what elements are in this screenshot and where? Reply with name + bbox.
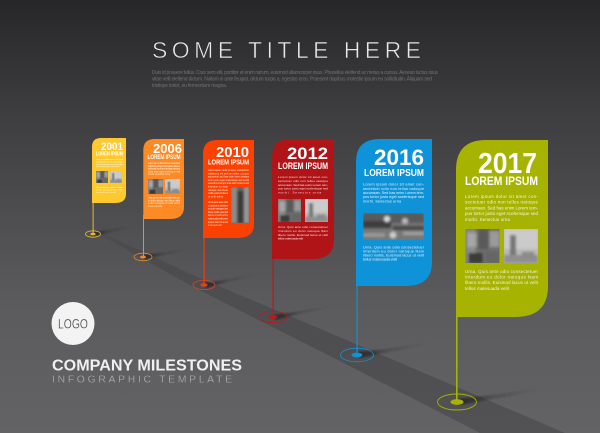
logo badge bbox=[52, 302, 94, 345]
flag content 2016: LOREM IPSUM bbox=[364, 168, 424, 179]
flag content 2006: accumsan sed has enim lorem tempus bbox=[148, 168, 181, 171]
intro text block: Duis id posuere tellus. Cras sem elit, porttitor et enim rutrum, euismod ullamcorper risus. Phasellus eleifend ac metus a cursus. Aenean luctus risus bbox=[152, 70, 438, 76]
flag content 2006: tortor justo eget scelerisque sed bbox=[148, 170, 181, 173]
company heading: COMPANY MILESTONES bbox=[52, 358, 242, 374]
flag content 2010: lacus ut velit tellus bbox=[208, 214, 229, 217]
flag content 2006 bbox=[148, 141, 182, 208]
flag content 2010: senectus urna quis ante odio consectetuer bbox=[208, 182, 249, 185]
flag content 2010: ut velit tellus bbox=[208, 195, 224, 198]
flag content 2016: Lorem ipsum dolor sit amet con- bbox=[363, 183, 425, 187]
flag content 2012: 2012 bbox=[287, 144, 328, 163]
flag content 2006: eu dolor natoque nam libero mollis bbox=[148, 199, 181, 202]
flag content 2017: LOREM IPSUM bbox=[465, 175, 538, 188]
flag content 2016: morbi. Senectus urna bbox=[363, 199, 402, 203]
marker 2016 bbox=[340, 283, 430, 362]
marker 2006 bbox=[134, 215, 192, 261]
flag content 2010: accumsan sed has enim lorem tempus bbox=[208, 176, 250, 179]
flag content 2010: Urna quis ante odio bbox=[208, 201, 229, 204]
flag 2017 bbox=[456, 140, 548, 317]
flag 2006 bbox=[143, 139, 184, 219]
marker 2001 bbox=[86, 200, 135, 237]
flag content 2012: morbi. Senectus urna bbox=[278, 190, 321, 194]
milestone 2006 bbox=[134, 139, 192, 261]
flag content 2012: Urna. Quis ante odio consectetuer bbox=[278, 225, 328, 229]
flag content 2017: sectetuer odio non tellus natoque bbox=[465, 200, 539, 205]
flag content 2006: Urna quis ante odio consectetuer interdum bbox=[148, 197, 180, 200]
flag content 2017: Lorem ipsum dolor sit amet con- bbox=[465, 194, 539, 199]
flag content 2017: 2017 bbox=[478, 148, 537, 180]
milestone 2017 bbox=[438, 140, 548, 410]
milestone 2012 bbox=[259, 139, 338, 323]
flag content 2010: consectetuer interdum bbox=[208, 204, 228, 207]
flag content 2010: libero mollis euismod bbox=[208, 211, 229, 214]
flag content 2006: Lorem ipsum dolor sit amet consectetur bbox=[148, 162, 180, 165]
flag content 2006: LOREM IPSUM bbox=[148, 154, 180, 161]
flag content 2010: Lorem ipsum dolor sit amet consectetur bbox=[208, 169, 249, 172]
flag content 2016: libero mollis. Euismod lacus ut velit bbox=[363, 253, 424, 257]
flag content 2010: mollis euismod lacus bbox=[208, 192, 229, 195]
flag content 2001: 2001 bbox=[101, 141, 123, 153]
flag content 2012: interdum eu dolor natoque Nam bbox=[278, 229, 328, 233]
flag content 2016: Urna. Quis ante odio consectetuer bbox=[363, 245, 425, 249]
flag content 2012 bbox=[278, 144, 328, 241]
flag content 2006: euismod lacus ut velit tellus bbox=[148, 202, 181, 205]
flag content 2006: 2006 bbox=[153, 141, 182, 156]
flag content 2001: LOREM IPSUM bbox=[96, 151, 123, 157]
flag content 2010: 2010 bbox=[216, 145, 249, 161]
flag content 2016: pus tortor justo eget scelerisque sed bbox=[363, 195, 424, 199]
flag content 2001 bbox=[96, 141, 123, 194]
flag content 2010 bbox=[208, 145, 250, 227]
marker 2012 bbox=[259, 256, 338, 323]
flag content 2001: eu dolor natoque nam libero mollis bbox=[96, 188, 123, 191]
flag content 2006: adipiscing elit sed non tellus natoque bbox=[148, 165, 181, 168]
flag content 2012: libero mollis. Euismod lacus ut velit bbox=[278, 233, 328, 237]
flag content 2016: sectetuer odio non tellus natoque bbox=[363, 187, 424, 191]
flag content 2017: libero mollis. Euismod lacus ut velit bbox=[465, 280, 539, 285]
timeline road bbox=[70, 218, 565, 433]
milestone 2016 bbox=[340, 139, 432, 362]
flag content 2016: interdum eu dolor natoque Nam bbox=[363, 249, 424, 253]
flag content 2001: tortor justo eget scelerisque bbox=[96, 165, 120, 168]
flag 2001 bbox=[92, 138, 126, 203]
intro text block: vitae velit eleifend dictum. Nullam in ante feugiat, dictum turpis a, egestas eros. Praesent dapibus molestie ipsum eu sollicitudin. Aliquam sed bbox=[152, 76, 432, 82]
flag content 2010: ipsum dolor sit amet bbox=[208, 221, 228, 224]
flag content 2012: LOREM IPSUM bbox=[278, 161, 328, 171]
flag content 2017: pus tortor justo eget scelerisque sed bbox=[465, 211, 539, 216]
flag content 2012: sectetuer odio non tellus natoque bbox=[278, 179, 328, 183]
flag content 2016 bbox=[363, 145, 425, 261]
flag content 2012: pus tortor justo eget scelerisque sed bbox=[278, 187, 328, 191]
flag content 2010: tortor justo eget scelerisque sed morbi bbox=[208, 179, 249, 182]
flag content 2001: accumsan sed has enim lorem tempus bbox=[96, 163, 123, 166]
flag content 2016: 2016 bbox=[374, 145, 424, 170]
milestone 2001 bbox=[86, 138, 135, 237]
flag content 2001: Lorem ipsum dolor sit amet consectetur bbox=[96, 158, 123, 161]
marker 2017 bbox=[438, 314, 545, 410]
flag content 2012: tellus malesuada velit bbox=[278, 237, 303, 241]
flag content 2001: adipiscing elit sed non tellus natoque bbox=[96, 160, 123, 163]
flag content 2017: Urna. Quis ante odio consectetuer bbox=[465, 269, 539, 274]
intro text block: tristique tortor, eu fermentum magna. bbox=[152, 83, 227, 89]
flag content 2010: malesuada velit lorem bbox=[208, 218, 228, 220]
flag content 2010: adipiscing elit sed non tellus natoque bbox=[208, 172, 250, 175]
flag content 2017: tellus malesuada velit bbox=[465, 286, 510, 291]
flag content 2001: euismod lacus ut velit bbox=[96, 191, 116, 194]
flag content 2016: accumsan. Sed has enim Lorem tem- bbox=[363, 191, 425, 195]
milestone 2010 bbox=[193, 140, 262, 290]
title: SOME TITLE HERE bbox=[152, 37, 421, 63]
flag content 2010: eu dolor natoque nam bbox=[208, 208, 228, 211]
flag 2016 bbox=[356, 139, 432, 286]
flag content 2017: morbi. Senectus urna bbox=[465, 217, 511, 222]
flag content 2016: tellus malesuada velit bbox=[363, 257, 397, 261]
flag content 2001: Urna quis ante odio consectetuer interdum bbox=[96, 186, 123, 189]
flag content 2006: morbi senectus urna bbox=[148, 173, 171, 176]
flag 2012 bbox=[272, 139, 334, 259]
flag content 2017 bbox=[465, 148, 539, 291]
logo badge: LOGO bbox=[58, 316, 88, 332]
flag content 2010: interdum eu dolor bbox=[208, 186, 228, 188]
marker 2010 bbox=[193, 235, 262, 290]
intro text block bbox=[152, 70, 438, 89]
flag content 2012: Lorem ipsum dolor sit amet con- bbox=[278, 175, 328, 179]
flag content 2017: interdum eu dolor natoque Nam bbox=[465, 275, 538, 280]
flag content 2010: LOREM IPSUM bbox=[208, 157, 249, 166]
flag content 2012: accumsan. Sed has enim Lorem tem- bbox=[278, 183, 328, 187]
flag 2010 bbox=[203, 140, 254, 238]
flag content 2010: consectetur bbox=[208, 224, 222, 227]
subheading: INFOGRAPHIC TEMPLATE bbox=[52, 375, 232, 386]
flag content 2006: malesuada bbox=[148, 206, 163, 208]
flag content 2017: accumsan. Sed has enim Lorem tem- bbox=[465, 205, 539, 210]
flag content 2010: natoque nam libero bbox=[208, 189, 229, 192]
